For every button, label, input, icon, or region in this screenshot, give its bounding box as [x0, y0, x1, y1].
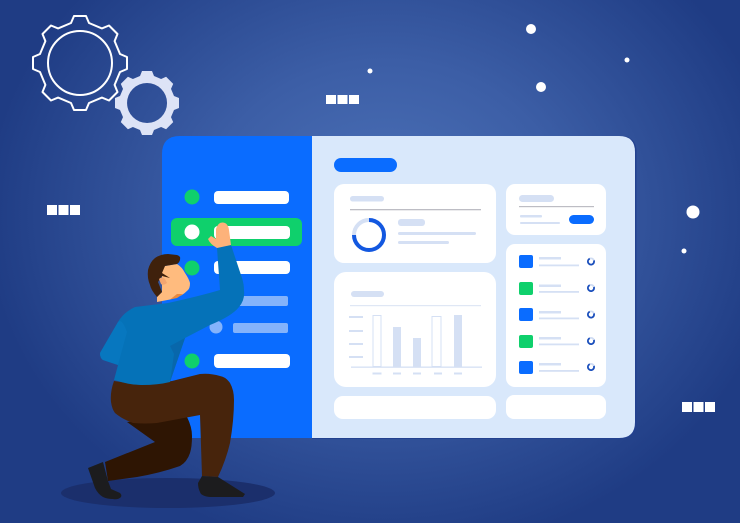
card: donut summary: [334, 184, 496, 263]
front leg: [111, 374, 234, 477]
ear: [159, 278, 167, 285]
decorative squares: right: [682, 402, 715, 412]
icon: solid gear: [115, 71, 179, 135]
hand: [208, 222, 231, 248]
hair: [148, 254, 180, 297]
decorative squares: top: [326, 95, 359, 104]
icon: outline gear: [33, 16, 127, 110]
card: bar chart: [334, 272, 496, 387]
panel: sidebar: [162, 136, 312, 438]
panel: main area: [300, 136, 635, 438]
figure: kneeling man: [88, 222, 245, 499]
shoes: [88, 462, 245, 499]
card: list: [506, 244, 606, 387]
header pill: [334, 158, 397, 172]
sidebar menu: [171, 190, 302, 368]
card: bottom left: [334, 396, 496, 419]
neck shadow: [170, 294, 183, 300]
ground shadow: [61, 478, 275, 508]
decorative squares: left: [47, 205, 80, 215]
shirt shade: [170, 338, 185, 382]
sleeve highlight: [100, 321, 127, 365]
neck and face: [157, 264, 190, 302]
card: bottom right: [506, 395, 606, 419]
panel edge: [312, 136, 636, 439]
back leg: [105, 417, 192, 481]
decorative dots: [368, 24, 700, 254]
torso and arm: [100, 245, 244, 385]
panel: dashboard window: [162, 136, 636, 439]
card: action: [506, 184, 606, 235]
